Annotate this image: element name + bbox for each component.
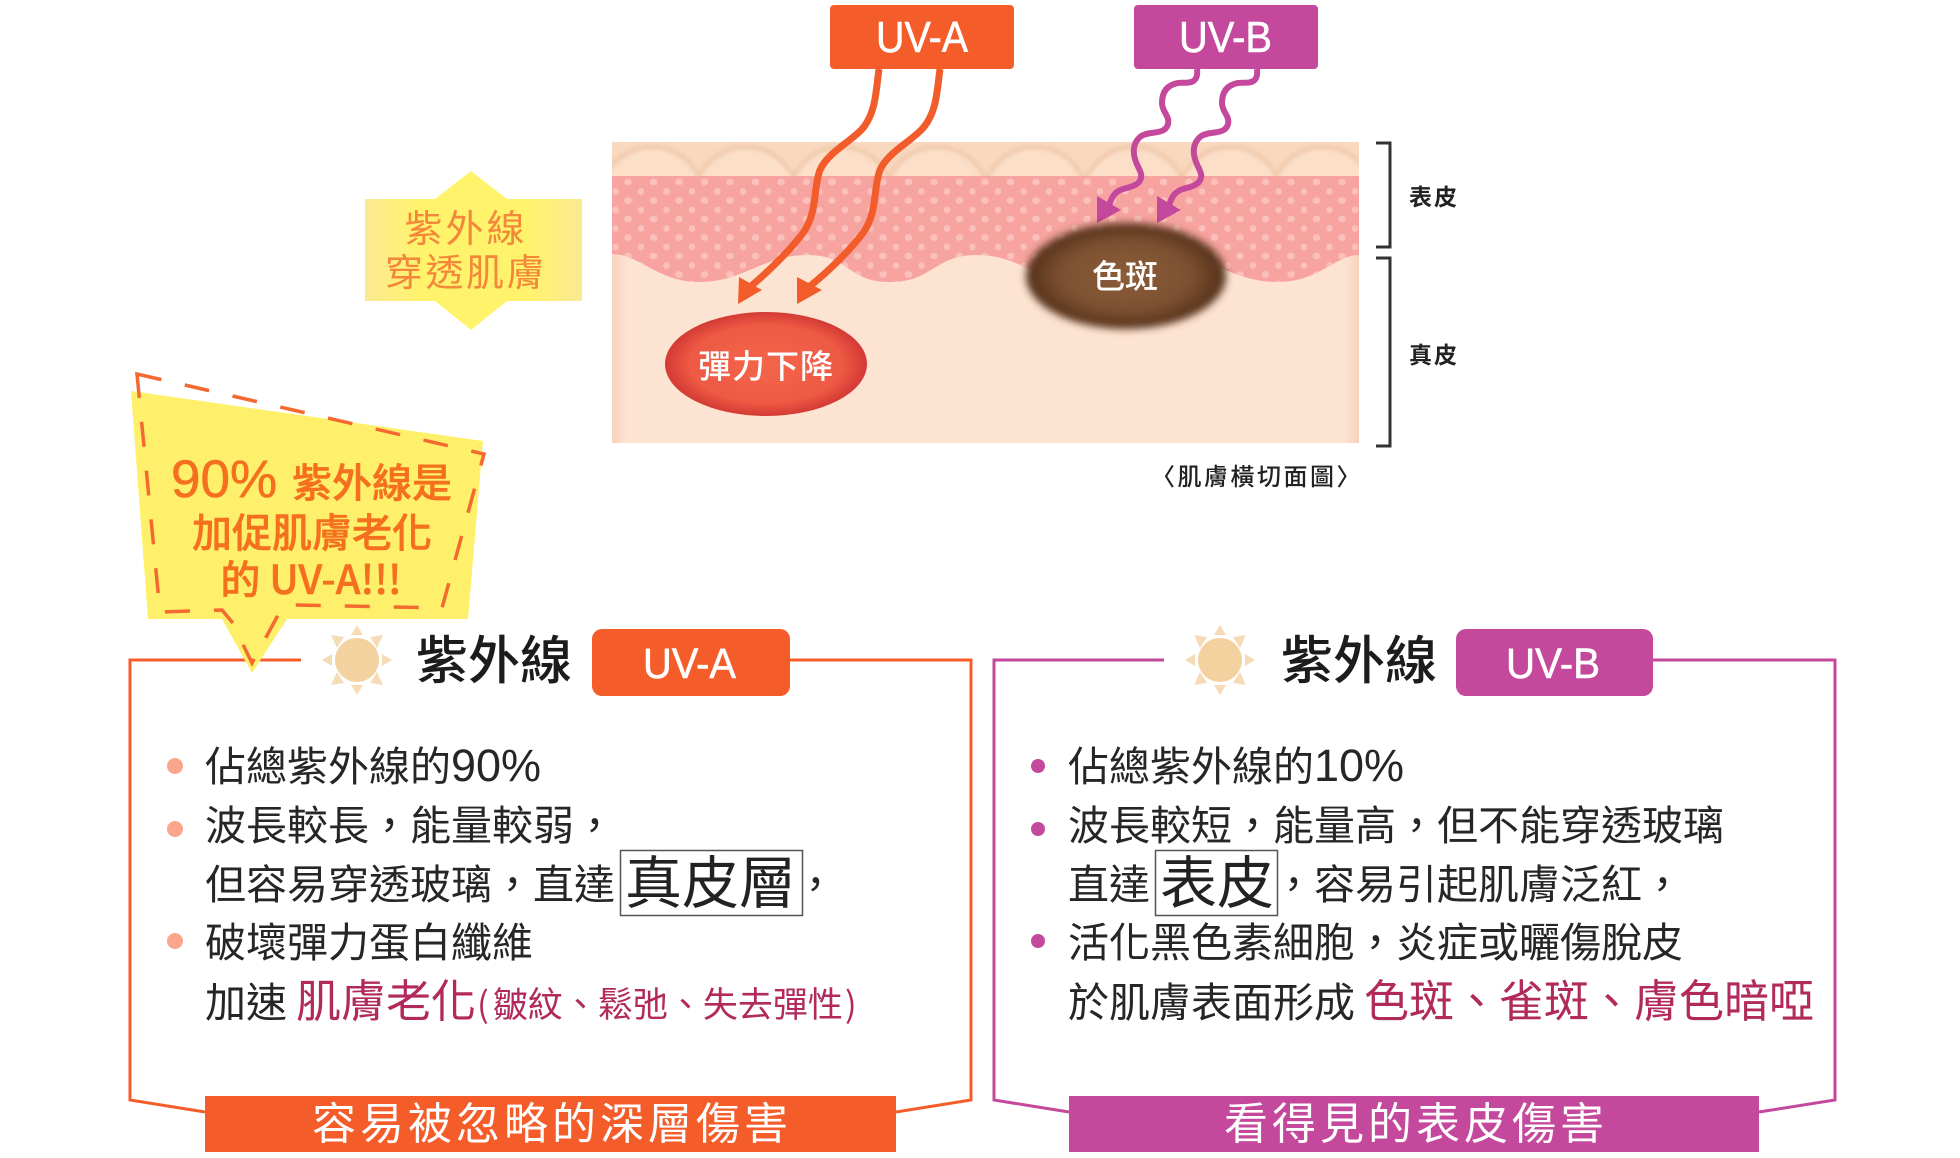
bullet list: 直達: [1068, 851, 1150, 911]
panel: UV-B: [994, 619, 1835, 1152]
callout: 90% UV-A: 90%: [171, 450, 277, 509]
epidermis cell layer: [612, 142, 1359, 176]
spot: pigmentation: 色斑: [1092, 250, 1158, 298]
bullet list: 加速: [205, 969, 287, 1029]
banner: 容易被忽略的深層傷害: [312, 1088, 792, 1152]
badge: UV penetrates skin: [365, 171, 582, 330]
bullet list: 波長較短，能量高，但不能穿透玻璃: [1068, 792, 1724, 852]
bracket: dermis: [1376, 258, 1459, 446]
bullet list: 佔總紫外線的90%: [205, 733, 541, 793]
label box: UV-A: UV-A: [876, 13, 969, 62]
pill: UV-A: [592, 629, 790, 696]
bracket: dermis: 真皮: [1409, 336, 1459, 370]
arrows: UV-B wavy rays: [1097, 69, 1257, 223]
bullet list: [167, 733, 857, 1030]
panel: UV-A: [130, 619, 971, 1152]
panel border: [994, 660, 1835, 1112]
panel border: [130, 660, 971, 1112]
bracket: epidermis: 表皮: [1409, 178, 1459, 212]
bullet list: 表皮: [1160, 838, 1274, 920]
bullet list: ，: [795, 851, 836, 911]
label box: UV-A: [830, 5, 1014, 69]
bullet list: 但容易穿透玻璃，直達: [205, 851, 615, 911]
banner: [1069, 1088, 1759, 1152]
icon: sun: [322, 625, 392, 695]
label box: UV-B: UV-B: [1179, 13, 1272, 62]
bullet list: 活化黑色素細胞，炎症或曬傷脫皮: [1068, 909, 1683, 969]
pill: UV-B: UV-B: [1506, 640, 1600, 688]
bullet list: (皺紋、鬆弛、失去彈性): [477, 977, 857, 1028]
bullet list: 真皮層: [625, 838, 796, 920]
bracket: epidermis: [1376, 143, 1459, 247]
callout: 90% UV-A: 的 UV-A!!!: [220, 548, 402, 606]
banner: 看得見的表皮傷害: [1224, 1088, 1608, 1152]
badge: UV penetrates skin: 穿透肌膚: [385, 242, 547, 297]
diagram caption: 〈肌膚橫切面圖〉: [1151, 457, 1363, 492]
skin cross-section diagram: [600, 142, 1375, 443]
heading: 紫外線: [1281, 619, 1437, 694]
bullet list: 破壞彈力蛋白纖維: [205, 909, 533, 969]
badge: UV penetrates skin: 紫外線: [404, 198, 528, 253]
bullet list: ，容易引起肌膚泛紅，: [1273, 851, 1683, 911]
callout: 90% UV-A: 加促肌膚老化: [192, 501, 432, 559]
spot: pigmentation: [1026, 223, 1226, 329]
banner: [205, 1088, 896, 1152]
bullet list: [1031, 733, 1814, 1030]
pill: UV-A: UV-A: [643, 640, 736, 688]
arrows: UV-A rays: [738, 69, 940, 304]
bullet list: 肌膚老化: [296, 965, 476, 1030]
heading: 紫外線: [416, 619, 572, 694]
icon: sun: [1185, 625, 1255, 695]
bullet list: 於肌膚表面形成: [1068, 969, 1355, 1029]
bullet list: 色斑、雀斑、膚色暗啞: [1364, 965, 1814, 1030]
callout: 90% UV-A: [131, 374, 484, 673]
bullet list: 波長較長，能量較弱，: [205, 792, 615, 852]
oval: elasticity decline: 彈力下降: [698, 340, 834, 388]
pink epidermis band: [612, 176, 1359, 286]
label box: UV-B: [1134, 5, 1318, 69]
callout: 90% UV-A: 紫外線是: [292, 451, 452, 509]
oval: elasticity decline: [665, 312, 867, 416]
pill: UV-B: [1456, 629, 1653, 696]
bullet list: 佔總紫外線的10%: [1068, 733, 1404, 793]
